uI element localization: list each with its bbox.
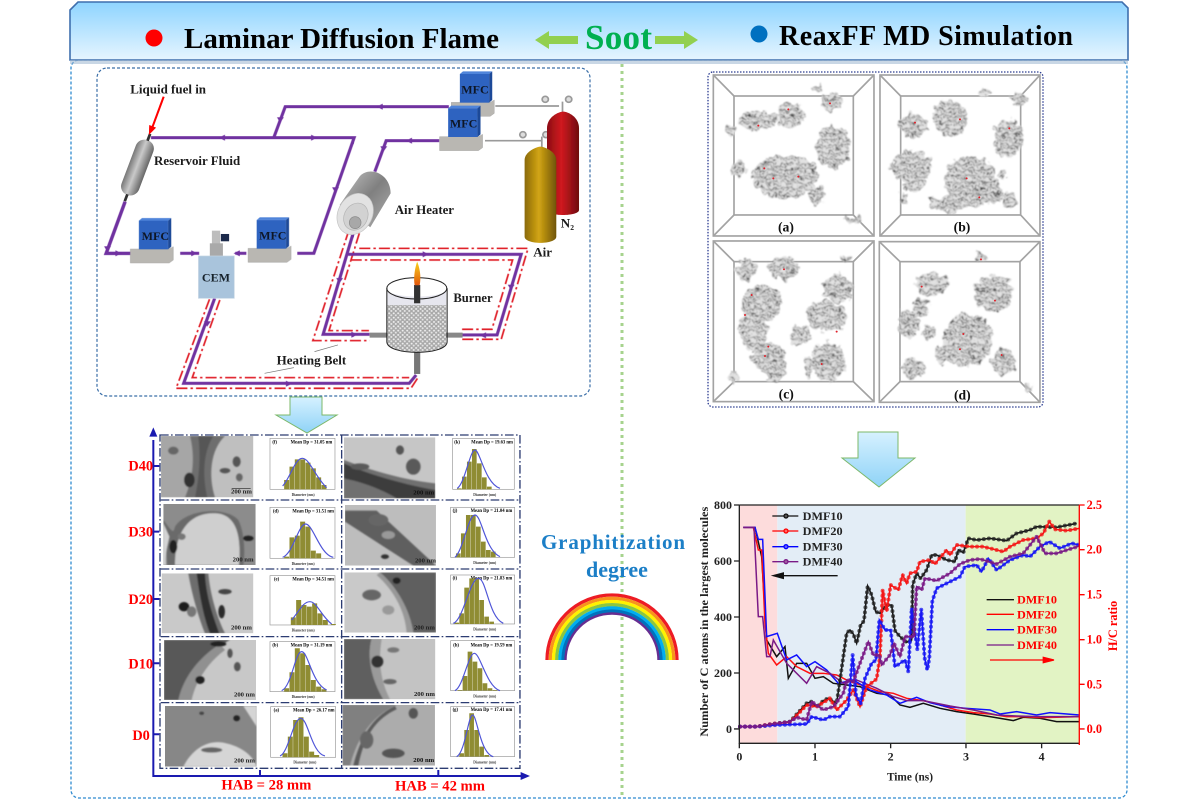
histogram j xyxy=(451,507,515,565)
histogram g xyxy=(451,707,515,764)
histogram j: Mean Dp = 21.04 nm xyxy=(471,509,512,514)
legend: carbon series: DMF10 xyxy=(803,509,843,523)
histogram j: (j) xyxy=(453,509,458,514)
arrow: apparatus to soot images xyxy=(276,397,337,433)
histogram k: Mean Dp = 19.63 nm xyxy=(471,440,513,445)
histogram h xyxy=(451,641,515,698)
arrow: MD to chart xyxy=(842,432,915,487)
row labels xyxy=(128,459,153,744)
left axis ticks xyxy=(714,498,732,736)
icon: valve xyxy=(210,231,229,257)
row labels: D20 xyxy=(128,592,153,608)
histogram h: Mean Dp = 19.59 nm xyxy=(471,644,512,649)
histogram b: Mean Dp = 31.19 nm xyxy=(291,644,332,649)
right axis ticks: 1.0 xyxy=(1087,633,1102,647)
axis titles: Number of C atoms in the largest molecules xyxy=(699,506,711,737)
diagram labels: Liquid fuel in xyxy=(130,83,206,97)
histogram b: (b) xyxy=(272,644,278,649)
axis titles: H/C ratio xyxy=(1106,601,1120,651)
histogram d: Diameter (nm) xyxy=(292,562,315,566)
CEM box: CEM xyxy=(202,270,230,284)
TEM images: 200 nm xyxy=(234,692,255,699)
legend: H/C series: DMF40 xyxy=(1017,639,1057,652)
column labels: HAB = 42 mm xyxy=(395,779,485,795)
histogram g: (g) xyxy=(453,708,459,713)
row labels: D0 xyxy=(132,728,150,744)
icon: air cylinder xyxy=(525,147,556,243)
bottom axis ticks: 3 xyxy=(963,750,969,764)
histogram d: (d) xyxy=(273,509,279,514)
histogram f: (f) xyxy=(272,440,277,445)
icon: burner xyxy=(370,262,463,374)
histogram g: Mean Dp = 17.41 nm xyxy=(471,708,512,713)
histogram f xyxy=(270,438,335,497)
CEM box xyxy=(198,256,234,298)
icon: air heater xyxy=(330,172,391,240)
icon: reservoir xyxy=(116,131,159,204)
heading: laminar diffusion flame: Laminar Diffusion Flame xyxy=(184,23,499,55)
text: graphitization degree: Graphitization xyxy=(541,530,685,554)
diagram labels: N xyxy=(561,216,570,230)
right axis ticks: 0.5 xyxy=(1087,677,1102,691)
legend: carbon series: DMF40 xyxy=(803,555,843,569)
purple tubing xyxy=(106,107,521,383)
histogram e xyxy=(270,576,335,632)
snapshot a xyxy=(713,75,874,236)
time phase backgrounds xyxy=(740,505,1079,743)
left axis ticks: 0 xyxy=(726,722,732,736)
TEM images: 200 nm xyxy=(414,624,435,631)
arrow: soot to simulation xyxy=(655,31,698,49)
histogram i: Diameter (nm) xyxy=(473,628,497,632)
arrow: right axis xyxy=(990,657,1054,663)
icon: red dot xyxy=(146,30,162,46)
right axis ticks: 2.5 xyxy=(1087,498,1102,512)
histogram i xyxy=(451,575,515,632)
heating belt leader lines xyxy=(265,345,338,373)
axes xyxy=(734,505,1085,748)
legend: H/C series: DMF10 xyxy=(1017,594,1057,607)
right axis ticks xyxy=(1087,498,1102,736)
arrow: left axis xyxy=(773,573,838,578)
histograms xyxy=(270,438,515,764)
diagram labels: Air Heater xyxy=(395,203,454,217)
histogram e: Diameter (nm) xyxy=(292,628,315,632)
histogram e: Mean Dp = 34.51 nm xyxy=(292,577,334,582)
column labels: HAB = 28 mm xyxy=(221,777,311,793)
histogram f: Diameter (nm) xyxy=(292,493,315,497)
left axis ticks: 600 xyxy=(714,554,732,568)
row labels: D40 xyxy=(128,459,153,475)
y axis and x axis xyxy=(149,427,530,780)
histogram a xyxy=(271,707,336,764)
axis titles xyxy=(699,506,1120,784)
carbon atom series xyxy=(740,522,1079,727)
header banner xyxy=(70,2,1128,64)
left axis ticks: 200 xyxy=(714,666,732,680)
centre dotted divider xyxy=(620,64,624,798)
TEM images: 200 nm xyxy=(414,691,435,698)
snapshot a: (a) xyxy=(778,219,794,235)
histogram e: (e) xyxy=(274,577,280,582)
heating belt lines xyxy=(176,230,528,388)
TEM images: 200 nm xyxy=(413,757,435,764)
MFC labels: MFC xyxy=(142,229,169,243)
TEM images: 200 nm xyxy=(415,557,436,564)
diagram labels xyxy=(130,83,574,368)
oxygen atoms xyxy=(744,102,1010,365)
histogram a: Mean Dp = 26.17 nm xyxy=(293,709,335,714)
right axis ticks: 0.0 xyxy=(1087,722,1102,736)
left axis ticks: 400 xyxy=(714,610,732,624)
arrow: soot to flame xyxy=(535,31,578,49)
histogram k: (k) xyxy=(454,440,460,445)
H/C ratio lines xyxy=(743,527,1079,722)
left axis ticks: 800 xyxy=(714,498,732,512)
MFC labels: MFC xyxy=(450,117,477,131)
heading: soot: Soot xyxy=(585,18,652,57)
diagram labels: Reservoir Fluid xyxy=(154,154,240,168)
right axis ticks: 1.5 xyxy=(1087,588,1102,602)
snapshot d xyxy=(879,242,1040,404)
icon: rainbow xyxy=(547,595,677,660)
snapshot b xyxy=(880,75,1040,236)
histogram i: Mean Dp = 21.83 nm xyxy=(471,577,512,582)
snapshot c: (c) xyxy=(779,386,794,402)
panel: TEM images and size histograms xyxy=(128,427,530,795)
right axis ticks: 2.0 xyxy=(1087,543,1102,557)
TEM images: 200 nm xyxy=(413,490,435,497)
grid frame xyxy=(160,435,520,768)
histogram a: Diameter (nm) xyxy=(293,760,317,764)
legend: carbon series: DMF30 xyxy=(803,540,843,554)
MFC labels: MFC xyxy=(259,228,287,242)
histogram a: (a) xyxy=(274,709,280,714)
TEM images xyxy=(161,436,436,767)
bottom axis ticks: 1 xyxy=(812,750,818,764)
text: graphitization degree xyxy=(541,530,685,582)
icon: blue dot xyxy=(750,26,768,42)
histogram k: Diameter (nm) xyxy=(473,493,497,497)
snapshot b: (b) xyxy=(954,219,970,235)
heading: reaxff md simulation: ReaxFF MD Simulation xyxy=(779,21,1073,52)
histogram i: (i) xyxy=(453,577,457,582)
icon: mfc units xyxy=(451,71,494,116)
TEM images: 200 nm xyxy=(231,489,252,496)
column labels xyxy=(221,777,485,795)
histogram d xyxy=(270,507,335,566)
bottom axis ticks: 0 xyxy=(736,750,742,764)
legend: H/C series xyxy=(987,594,1057,652)
axis titles: Time (ns) xyxy=(887,772,933,784)
histogram j: Diameter (nm) xyxy=(473,561,497,565)
chart: carbon atoms and H/C ratio xyxy=(699,498,1120,784)
legend: carbon series: DMF20 xyxy=(803,524,843,538)
histogram b: Diameter (nm) xyxy=(292,695,315,699)
diagram labels: 2 xyxy=(570,223,574,232)
diagram labels: Air xyxy=(533,246,552,260)
row labels: D10 xyxy=(128,656,153,672)
histogram b xyxy=(270,642,335,699)
legend: carbon series xyxy=(772,509,843,569)
histogram d: Mean Dp = 31.51 nm xyxy=(292,509,334,514)
legend: H/C series: DMF20 xyxy=(1017,608,1057,621)
flow arrowheads xyxy=(104,104,515,387)
bottom axis ticks: 4 xyxy=(1039,750,1045,764)
snapshot c xyxy=(713,241,874,402)
panel: MD snapshots xyxy=(708,72,1043,407)
gas regulators xyxy=(485,96,572,148)
histogram h: (h) xyxy=(453,644,459,649)
histogram k xyxy=(453,438,514,497)
text: graphitization degree: degree xyxy=(586,557,648,582)
MFC labels: MFC xyxy=(461,83,489,96)
legend: H/C series: DMF30 xyxy=(1017,624,1057,637)
icon: nitrogen cylinder xyxy=(547,112,579,215)
bottom axis ticks xyxy=(736,750,1045,764)
diagram labels: Heating Belt xyxy=(277,354,347,368)
MFC labels xyxy=(142,83,489,243)
TEM images: 200 nm xyxy=(231,624,252,631)
TEM images: 200 nm xyxy=(233,556,254,563)
TEM images: 200 nm xyxy=(234,758,255,765)
row labels: D30 xyxy=(128,525,153,541)
histogram h: Diameter (nm) xyxy=(473,694,497,698)
panel: flame apparatus xyxy=(97,68,590,396)
snapshot d: (d) xyxy=(954,388,971,404)
histogram g: Diameter (nm) xyxy=(473,760,497,764)
bottom axis ticks: 2 xyxy=(888,750,894,764)
diagram labels: Burner xyxy=(453,291,493,305)
histogram f: Mean Dp = 31.05 nm xyxy=(291,440,332,445)
icon: fuel inlet arrow xyxy=(149,97,164,135)
